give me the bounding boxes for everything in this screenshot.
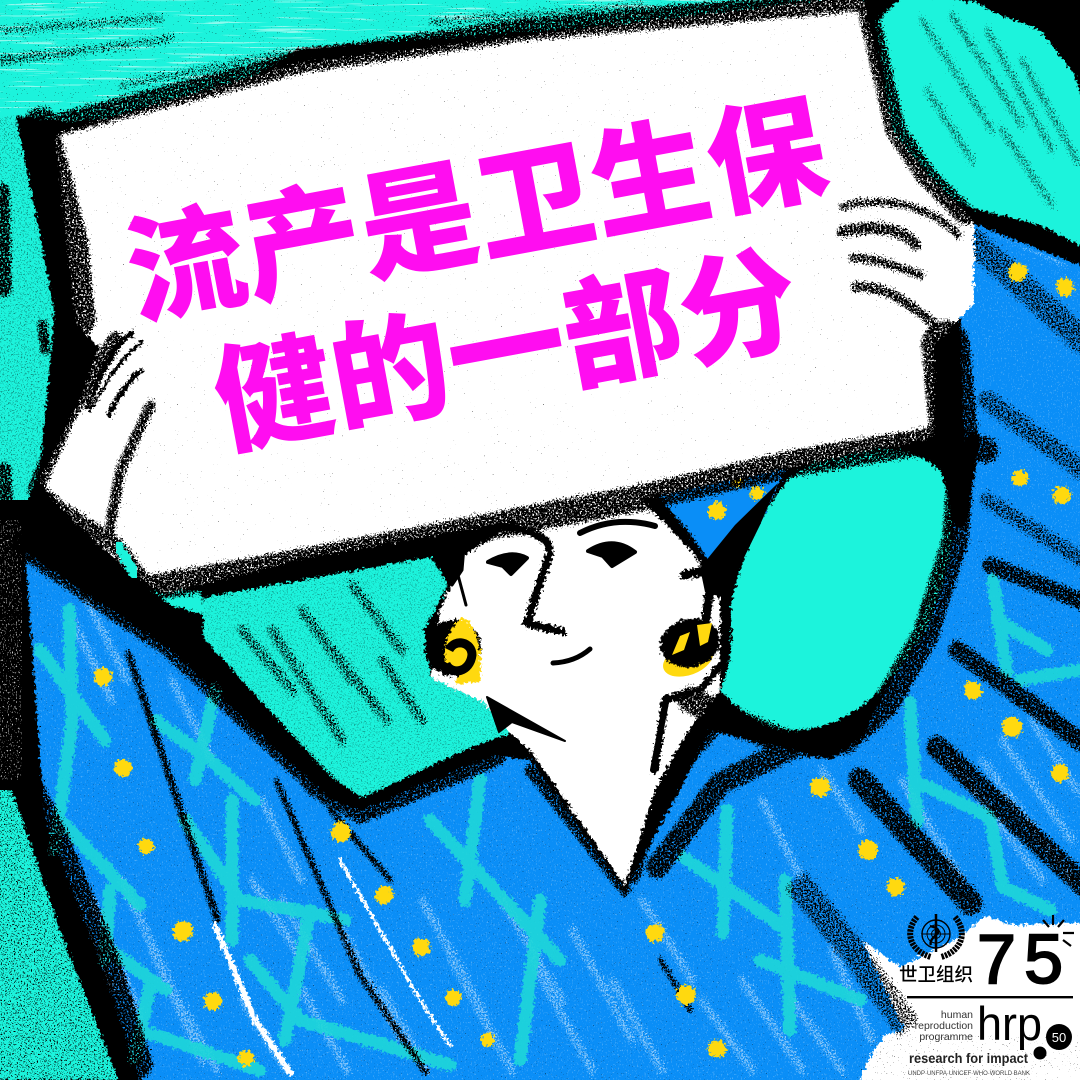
divider (907, 996, 1073, 998)
face features (435, 500, 702, 770)
face speckle (440, 500, 720, 600)
headline line 2: 健的一部分 (205, 234, 809, 471)
black ring (656, 613, 724, 673)
neck and face (431, 498, 720, 885)
blue under-sign patch (655, 462, 790, 562)
loose chalk shading on right sleeve (970, 240, 1080, 560)
chin wedge (487, 697, 565, 741)
top right dark streaks (920, 15, 1075, 205)
HRP name: human (941, 1009, 973, 1021)
left column dark texture (0, 115, 56, 500)
neck line (653, 697, 667, 770)
logos block (899, 914, 1074, 1077)
headline line 1: 流产是卫生保 (117, 83, 837, 342)
HRP name: programme (919, 1031, 973, 1043)
logo patch specks (860, 1035, 1080, 1080)
hair outline (190, 640, 495, 812)
logo patch bottom strip (862, 1070, 1080, 1080)
yellow inner (672, 623, 712, 655)
teal hair: speckle (203, 558, 509, 797)
left edge black and white chalk (0, 500, 34, 790)
partner names: UNDP·UNFPA·UNICEF·WHO·WORLD BANK (908, 1070, 1031, 1077)
shirt chalk dust (26, 224, 1080, 1080)
earring spiral (446, 643, 472, 671)
right eye (588, 543, 635, 566)
WHO 75 mark: 75 (977, 920, 1063, 998)
sign paper speckle (67, 16, 923, 569)
right earring (656, 613, 724, 683)
shirt outline strokes (22, 545, 787, 1064)
shirt bottom strip (145, 1072, 1080, 1080)
black chalk stripes on shirt (128, 565, 1080, 1072)
right hair solid outline (655, 440, 972, 770)
left hand finger lines (87, 333, 142, 415)
right hair spike (700, 483, 778, 598)
shirt speckle (0, 540, 1080, 1080)
hair streaks (240, 585, 420, 740)
teal crosshatch pattern on shirt (40, 580, 1080, 1070)
sign black border (40, 0, 985, 590)
HRP name: reproduction (915, 1020, 973, 1032)
icon: hrp dot (1034, 1046, 1046, 1060)
left cheek hair (435, 535, 466, 605)
mouth (553, 649, 590, 663)
brow and nose line (472, 527, 563, 632)
headline on sign (117, 83, 837, 471)
teal background: bottom left (0, 750, 118, 1080)
earring black ring (425, 620, 481, 676)
WHO Chinese name: 世卫组织 (899, 964, 973, 985)
research for impact: research for impact (909, 1051, 1028, 1066)
shirt chalk streaks (60, 230, 1075, 1070)
forehead outline (640, 500, 702, 562)
edge black (0, 500, 34, 790)
teal sleeve cuff (118, 545, 135, 575)
top band streaks (0, 0, 880, 130)
teal background: top band (0, 0, 885, 122)
left hand outline (35, 340, 150, 590)
right hair outline (690, 440, 962, 745)
white patch behind logos (860, 915, 1080, 1080)
icon: sun rays (1043, 915, 1074, 946)
yellow dots on shirt (94, 263, 1074, 1066)
teal background: left column (0, 108, 54, 560)
top band dark chalk lines (0, 2, 800, 85)
white sign with raised hands (50, 5, 965, 585)
edge chalk dust (0, 520, 22, 780)
left column dark patches (2, 190, 45, 540)
left eye (488, 554, 527, 574)
right hand finger lines (842, 202, 958, 325)
hrp 50 badge: 50 (1052, 1030, 1066, 1045)
blue shirt (25, 220, 1080, 1080)
white chalk slashes on shirt (215, 860, 450, 1074)
hrp 50 badge (1046, 1024, 1072, 1050)
yellow base (658, 637, 718, 683)
teal hair cuff (148, 590, 205, 615)
teal background: top right (876, 0, 1080, 250)
teal hair: left (203, 557, 510, 798)
black stroke by logo (793, 880, 907, 1028)
icon: WHO emblem (910, 914, 962, 957)
bottom left dark texture (0, 790, 119, 1080)
right brow (580, 522, 655, 533)
hrp wordmark: hrp (977, 997, 1042, 1050)
teal hair: right (720, 448, 951, 730)
earring yellow (444, 617, 481, 684)
top band dark specks (0, 0, 820, 123)
left earring (425, 617, 481, 684)
